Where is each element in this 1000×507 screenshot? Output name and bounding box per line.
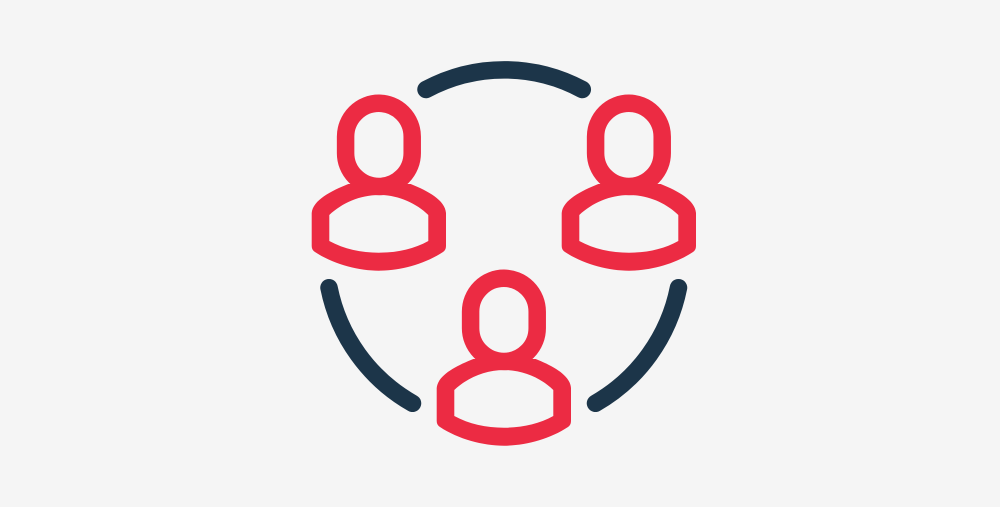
icon: person top right [562, 103, 696, 271]
connecting arc: top [426, 70, 582, 90]
icon: person top left [312, 103, 446, 271]
connecting arc: lower right [596, 288, 678, 403]
icon: person bottom center [437, 278, 571, 446]
connecting arc: lower left [329, 288, 412, 403]
